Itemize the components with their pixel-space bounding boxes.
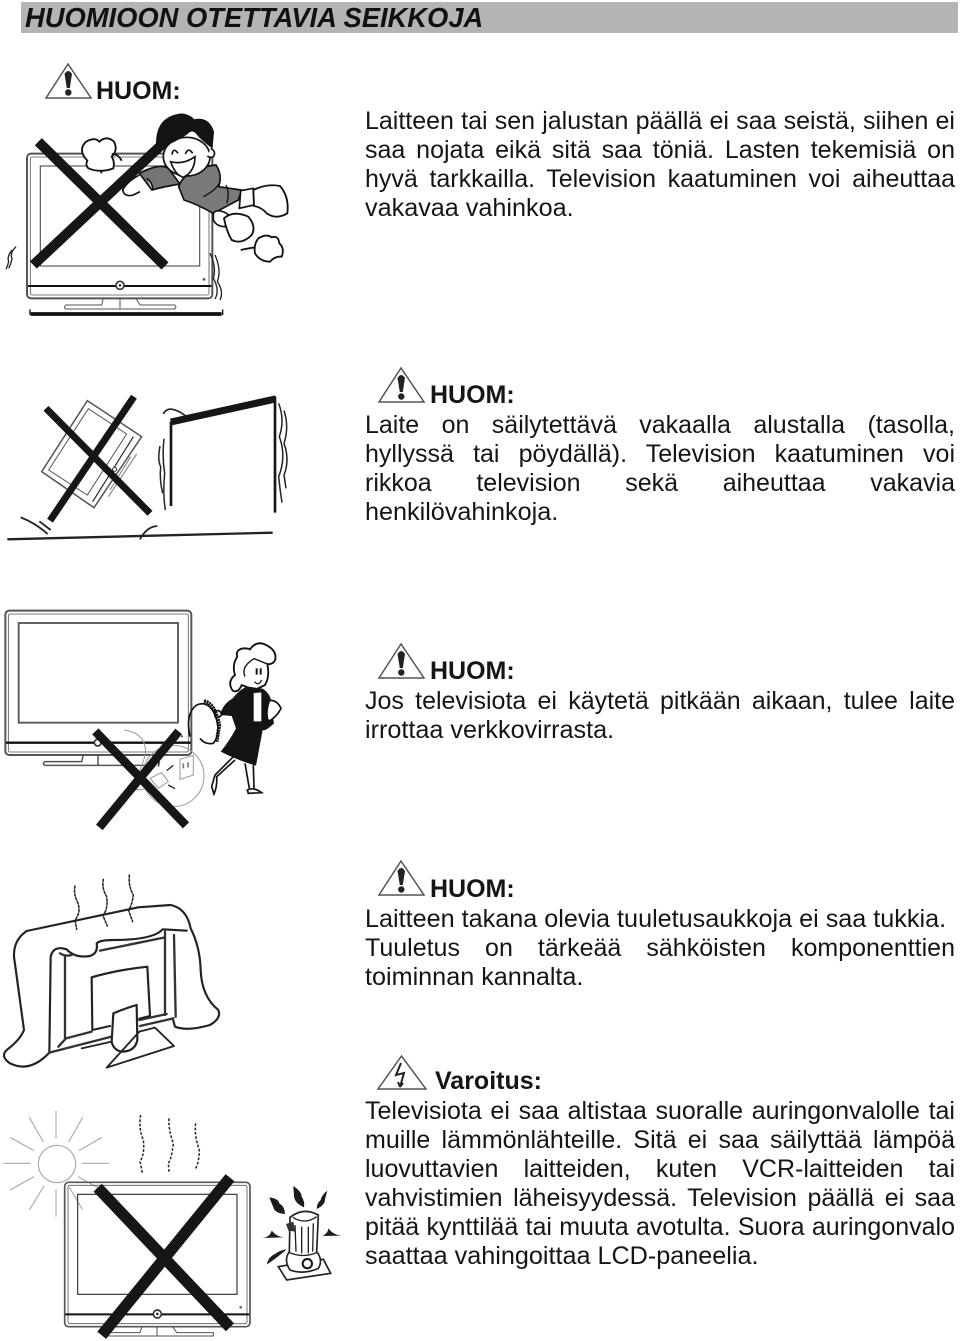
TV [27, 154, 212, 309]
text block: heat and sunlight: vahvistimien läheisyydessä. Television päällä ei saa [365, 1184, 955, 1212]
text block: stable surface [365, 381, 956, 526]
woman [230, 643, 275, 691]
illustration: child climbing on crossed-out TV [5, 113, 289, 316]
text block: ventilation: Tuuletus on tärkeää sähköisten komponenttien [365, 934, 955, 962]
TV [5, 611, 191, 765]
title bar: HUOMIOON OTETTAVIA SEIKKOJA [25, 2, 483, 33]
X [95, 731, 186, 827]
shake lines [159, 403, 287, 510]
heading: HUOM 3: HUOM: [430, 657, 515, 685]
illustration: woman carrying cord next to unplugged TV [4, 610, 282, 830]
text block: unplug when unused: Jos televisiota ei käytetä pitkään aikaan, tulee laite [365, 687, 955, 715]
child [139, 166, 180, 190]
text block: standing on the TV: hyvä tarkkailla. Television kaatuminen voi aiheuttaa [365, 165, 955, 193]
text block: unplug when unused: irrottaa verkkovirrasta. [365, 716, 614, 744]
shake lines [6, 247, 222, 300]
icon: warning triangle 3 [378, 642, 426, 679]
illustration: TV falling off a table [7, 394, 288, 540]
text block: standing on the TV [365, 107, 956, 222]
title bar [21, 2, 958, 33]
text block: heat and sunlight: pitää kynttilää tai muuta avotulta. Suora auringonvalo [365, 1213, 955, 1241]
text block: standing on the TV: vakavaa vahinkoa. [365, 194, 574, 222]
puff top [82, 138, 122, 173]
legs and boots [239, 188, 254, 208]
illustration: TV covered with a cloth [2, 874, 220, 1069]
icon: lightning warning triangle [376, 1054, 428, 1090]
text block: heat and sunlight [365, 1067, 956, 1270]
text block: heat and sunlight: Televisiota ei saa altistaa suoralle auringonvalolle tai [365, 1097, 955, 1125]
X [33, 142, 165, 266]
heading: HUOM 2: HUOM: [430, 381, 515, 409]
text block: ventilation [365, 875, 955, 991]
text block: stable surface: hyllyssä tai pöydällä). Television kaatuminen voi [365, 440, 955, 468]
text block: stable surface: henkilövahinkoja. [365, 498, 558, 526]
plug and socket inset [124, 730, 204, 807]
text block: heat and sunlight: luovuttavien laitteiden, kuten VCR-laitteiden tai [365, 1155, 955, 1183]
text block: stable surface: Laite on säilytettävä vakaalla alustalla (tasolla, [365, 411, 955, 439]
X [98, 1178, 230, 1335]
text block: standing on the TV: saa nojata eikä sitä saa töniä. Lasten tekemisiä on [365, 136, 955, 164]
TV [65, 1182, 250, 1336]
heading: Varoitus: Varoitus: [435, 1067, 542, 1095]
X [46, 397, 150, 521]
text block: stable surface: rikkoa television sekä aiheuttaa vakavia [365, 469, 955, 497]
tilted TV [42, 401, 142, 508]
sun [3, 1111, 109, 1217]
text block: heat and sunlight: saattaa vahingoittaa LCD-paneelia. [365, 1242, 758, 1270]
text block: unplug when unused [365, 657, 955, 744]
heading: HUOM 4: HUOM: [430, 875, 515, 903]
text block: standing on the TV: Laitteen tai sen jalustan päällä ei saa seistä, siihen ei [365, 107, 955, 135]
cord coil [188, 704, 218, 744]
icon: warning triangle 4 [378, 860, 426, 896]
heat waves [140, 1115, 199, 1173]
puff bottom [241, 236, 283, 262]
floor [7, 533, 273, 539]
text block: heat and sunlight: muille lämmönlähteille. Sitä ei saa säilyttää lämpöä [365, 1126, 955, 1154]
table [170, 395, 275, 425]
text block: ventilation: Laitteen takana olevia tuuletusaukkoja ei saa tukkia. [365, 905, 946, 933]
text block: ventilation: toiminnan kannalta. [365, 963, 583, 991]
icon: warning triangle 2 [378, 366, 426, 403]
heading: HUOM 1: HUOM: [96, 77, 181, 105]
illustration: sun, heater and crossed-out TV [3, 1110, 342, 1339]
icon: warning triangle 1 [44, 62, 92, 99]
heater [278, 1259, 331, 1280]
